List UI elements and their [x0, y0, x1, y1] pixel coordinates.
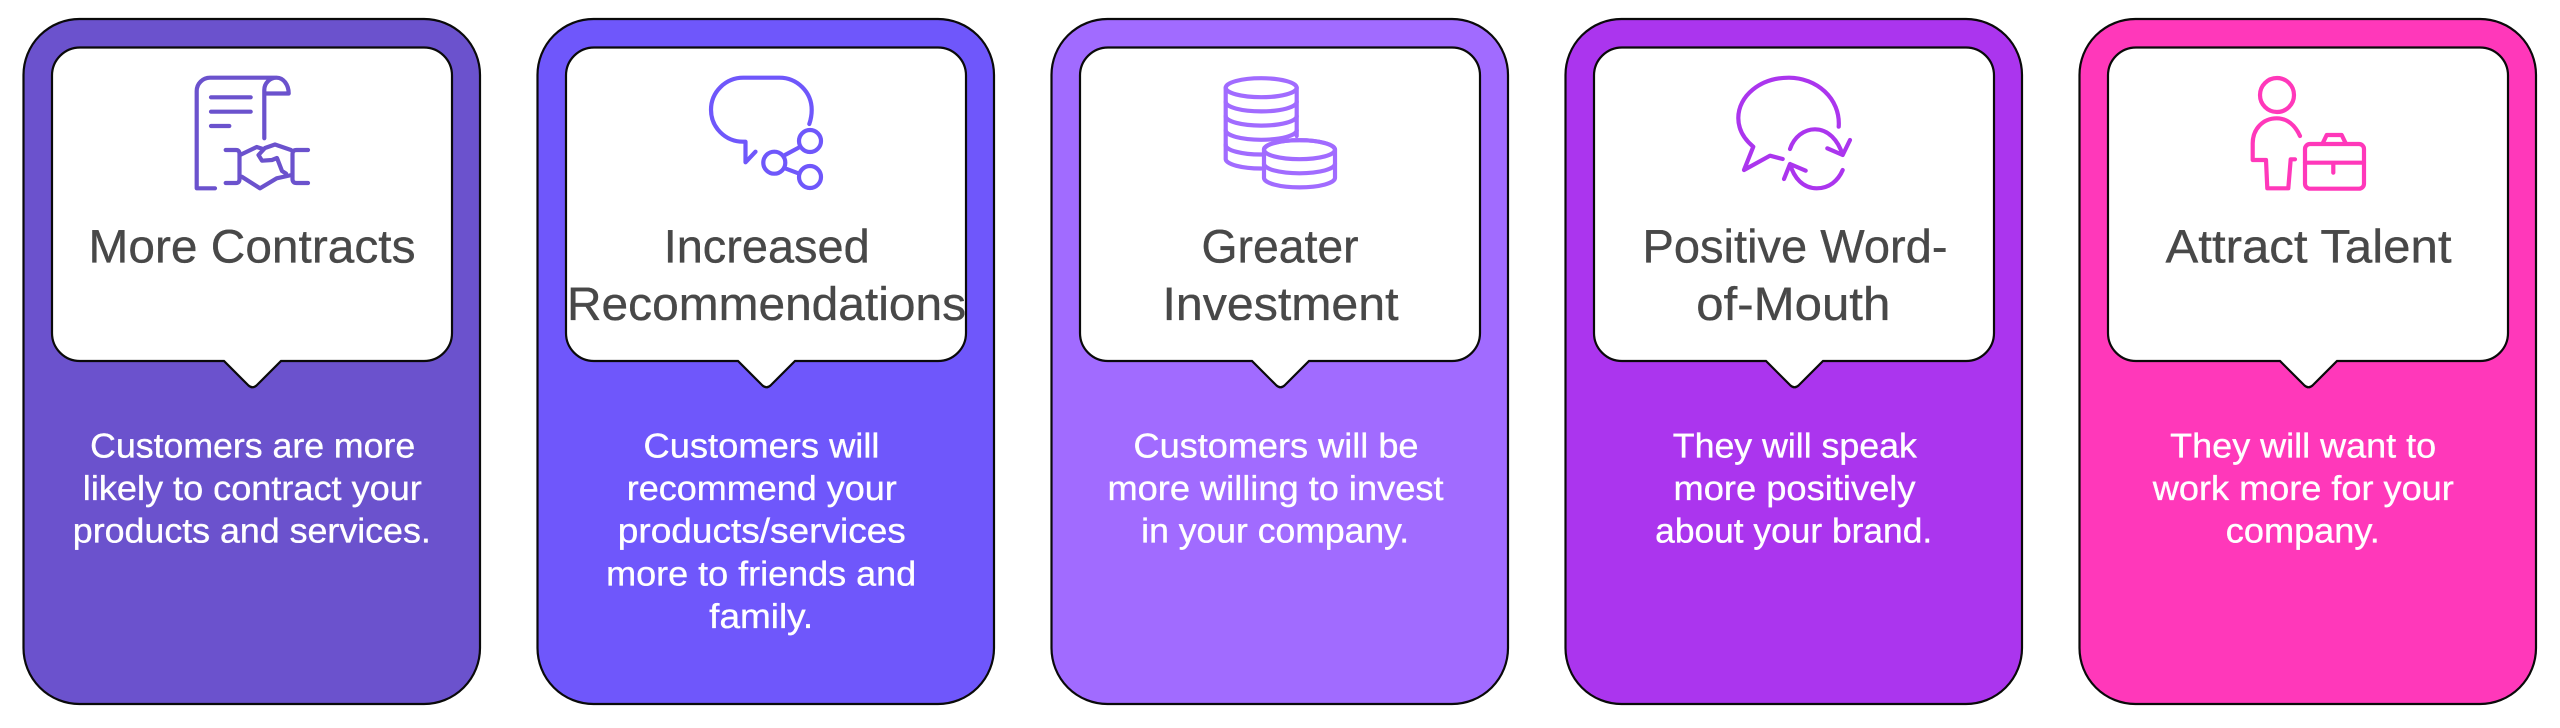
panel: increased recommendations — [538, 19, 994, 704]
heading: Greater — [1202, 220, 1358, 273]
body text: company. — [2226, 513, 2380, 551]
body text: in your company. — [1141, 513, 1409, 551]
body text — [73, 428, 431, 551]
body text — [2152, 428, 2454, 551]
body text — [1108, 428, 1444, 551]
body text: likely to contract your — [83, 470, 422, 508]
icon: person with briefcase — [2253, 78, 2364, 189]
body text: recommend your — [627, 470, 897, 508]
panel: positive word-of-mouth — [1566, 19, 2022, 704]
icon: speech bubble with cycle arrows — [1738, 78, 1850, 188]
heading — [1162, 220, 1398, 330]
card background — [1566, 19, 2022, 704]
icon: speech bubble with share — [711, 78, 821, 188]
heading: Positive Word- — [1642, 220, 1948, 273]
heading: Recommendations — [567, 277, 966, 330]
body text: about your brand. — [1655, 513, 1932, 551]
body text: more willing to invest — [1108, 470, 1444, 508]
body text: Customers will be — [1134, 428, 1418, 466]
body text: They will want to — [2170, 428, 2436, 466]
speech bubble panel — [2108, 48, 2508, 387]
heading: Increased — [664, 220, 870, 273]
body text: They will speak — [1673, 428, 1918, 466]
body text — [1655, 428, 1932, 551]
heading — [567, 220, 966, 330]
icon: coin stacks — [1226, 78, 1335, 187]
speech bubble panel — [52, 48, 452, 387]
card background — [538, 19, 994, 704]
speech bubble panel — [1080, 48, 1480, 387]
body text: products/services — [618, 513, 906, 551]
card background — [2080, 19, 2536, 704]
body text: Customers will — [644, 428, 880, 466]
heading: Investment — [1162, 277, 1398, 330]
heading: of-Mouth — [1696, 277, 1890, 330]
panel: greater investment — [1052, 19, 1508, 704]
heading: More Contracts — [88, 220, 416, 273]
body text: products and services. — [73, 513, 431, 551]
card background — [24, 19, 480, 704]
speech bubble panel — [1594, 48, 1994, 387]
card background — [1052, 19, 1508, 704]
speech bubble panel — [566, 48, 966, 387]
heading: Attract Talent — [2166, 220, 2452, 273]
panel: more contracts — [24, 19, 480, 704]
icon: contract and handshake — [197, 78, 308, 188]
panel: attract talent — [2080, 19, 2536, 704]
body text: family. — [709, 598, 813, 636]
body text: Customers are more — [90, 428, 415, 466]
heading — [1642, 220, 1948, 330]
body text — [606, 428, 916, 636]
body text: work more for your — [2152, 470, 2454, 508]
body text: more positively — [1674, 470, 1916, 508]
body text: more to friends and — [606, 556, 916, 594]
